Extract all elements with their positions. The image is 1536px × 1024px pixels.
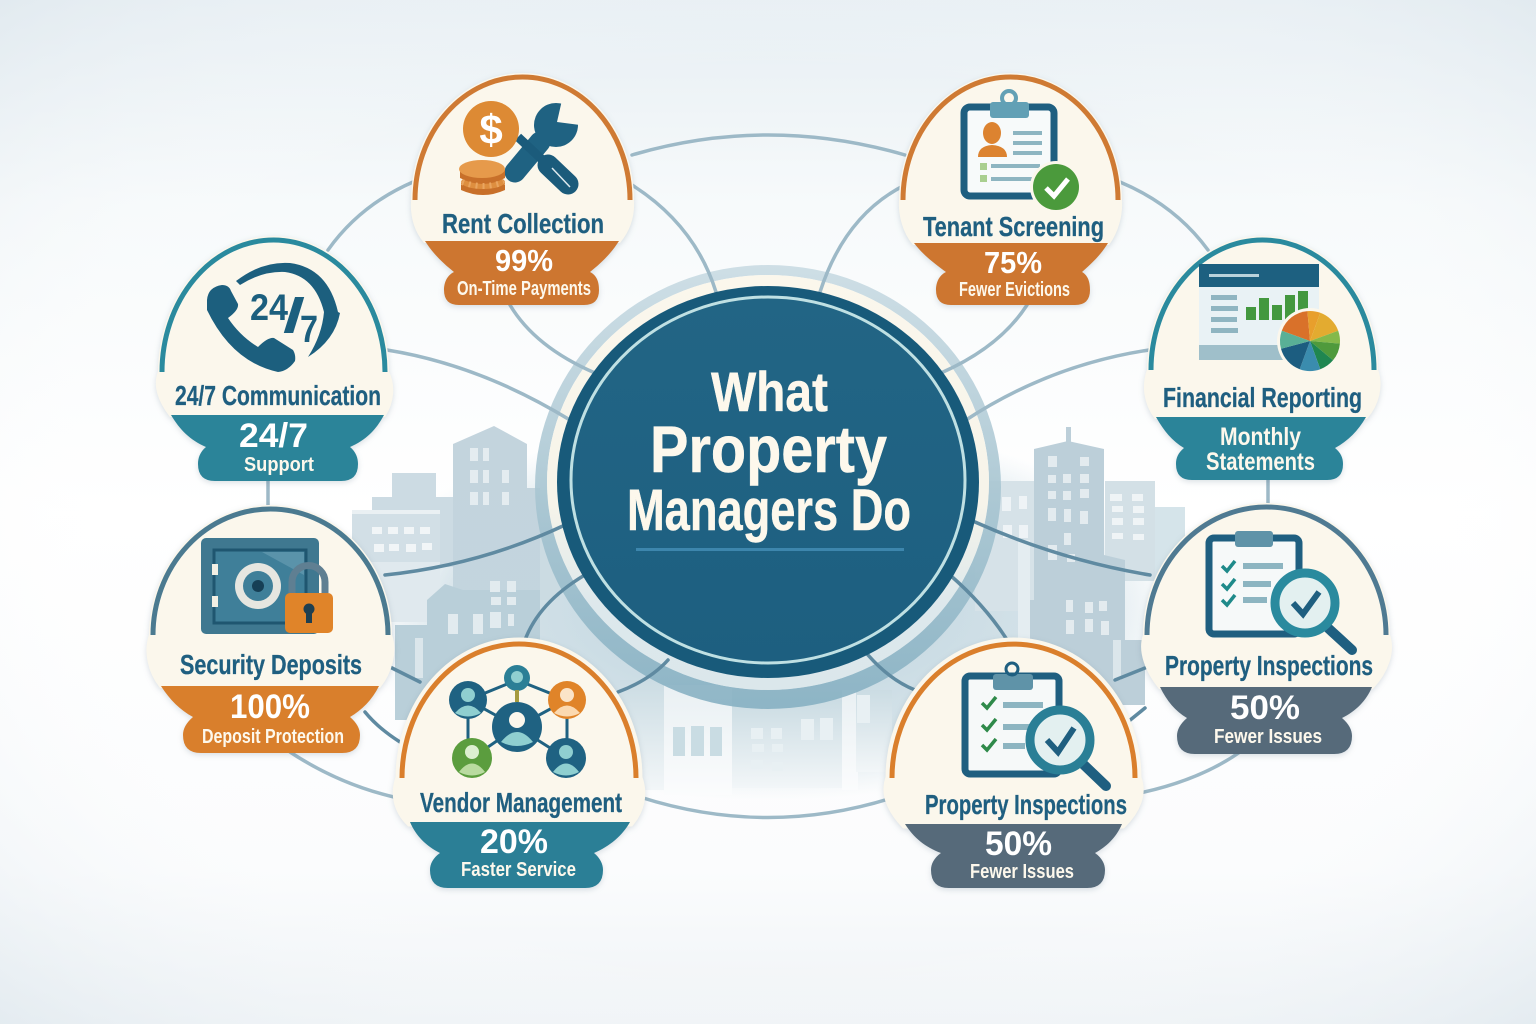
card: property inspections (bottom) [888, 642, 1139, 888]
stat: 50%: 50% [1230, 689, 1300, 727]
card: tenant screening [901, 75, 1120, 305]
icon: clipboard and magnifier [965, 663, 1106, 786]
icon: report window with bar and pie charts [1199, 264, 1343, 374]
hub outer ring [535, 265, 1001, 709]
central hub [557, 286, 979, 678]
label: vendor management: Vendor Management [420, 787, 622, 818]
card: vendor management [397, 642, 641, 888]
label: 24/7 communication: 24/7 Communication [175, 380, 381, 411]
label: property inspections: Property Inspections [925, 789, 1127, 820]
title: Property [650, 412, 887, 486]
stat: 24/7: 24/7 [239, 417, 308, 455]
label: security deposits: Security Deposits [180, 649, 362, 680]
city skyline backdrop [348, 420, 1188, 800]
stat: 99%: 99% [495, 243, 553, 278]
caption: fewer issues: Fewer Issues [1214, 726, 1322, 748]
icon: phone with 24/7 arc [207, 263, 340, 372]
title [627, 360, 911, 543]
caption: monthly statements [1206, 423, 1315, 476]
icon: phone with 24/7 arc: 7 [300, 309, 318, 351]
caption: fewer issues: Fewer Issues [970, 861, 1074, 883]
caption: fewer evictions: Fewer Evictions [959, 279, 1070, 301]
card: property inspections (right) [1143, 505, 1390, 754]
card: 24/7 communication [158, 238, 391, 481]
title: What [711, 360, 828, 423]
label: property inspections: Property Inspections [1165, 650, 1373, 681]
label: rent collection: Rent Collection [442, 208, 604, 239]
icon: clipboard with tenant profile and check [964, 91, 1082, 213]
stat: 50%: 50% [985, 825, 1052, 863]
icon: safe and padlock [201, 538, 333, 634]
caption: deposit protection: Deposit Protection [202, 726, 344, 748]
stat: 75%: 75% [984, 245, 1042, 280]
icon: dollar coin, wrench and screwdriver: $ [479, 106, 503, 153]
card: rent collection [413, 75, 632, 305]
icon: phone with 24/7 arc: 24 [250, 287, 288, 328]
caption: faster service: Faster Service [461, 859, 576, 881]
title: Managers Do [627, 478, 911, 543]
stat: 20%: 20% [480, 823, 548, 861]
card: financial reporting [1146, 238, 1379, 480]
icon: vendor network [449, 665, 586, 778]
card: security deposits [148, 507, 392, 753]
label: financial reporting: Financial Reporting [1163, 382, 1362, 413]
caption: support: Support [244, 454, 314, 476]
icon: phone with 24/7 arc: / [283, 290, 305, 343]
caption: monthly statements: Monthly [1220, 423, 1301, 451]
icon: dollar coin, wrench and screwdriver [459, 100, 582, 195]
caption: on-time payments: On-Time Payments [457, 278, 591, 300]
caption: monthly statements: Statements [1206, 448, 1315, 476]
connector lines [268, 135, 1268, 818]
label: tenant screening: Tenant Screening [923, 211, 1104, 242]
icon: clipboard and magnifier [1209, 531, 1352, 650]
stat: 100%: 100% [230, 688, 310, 726]
